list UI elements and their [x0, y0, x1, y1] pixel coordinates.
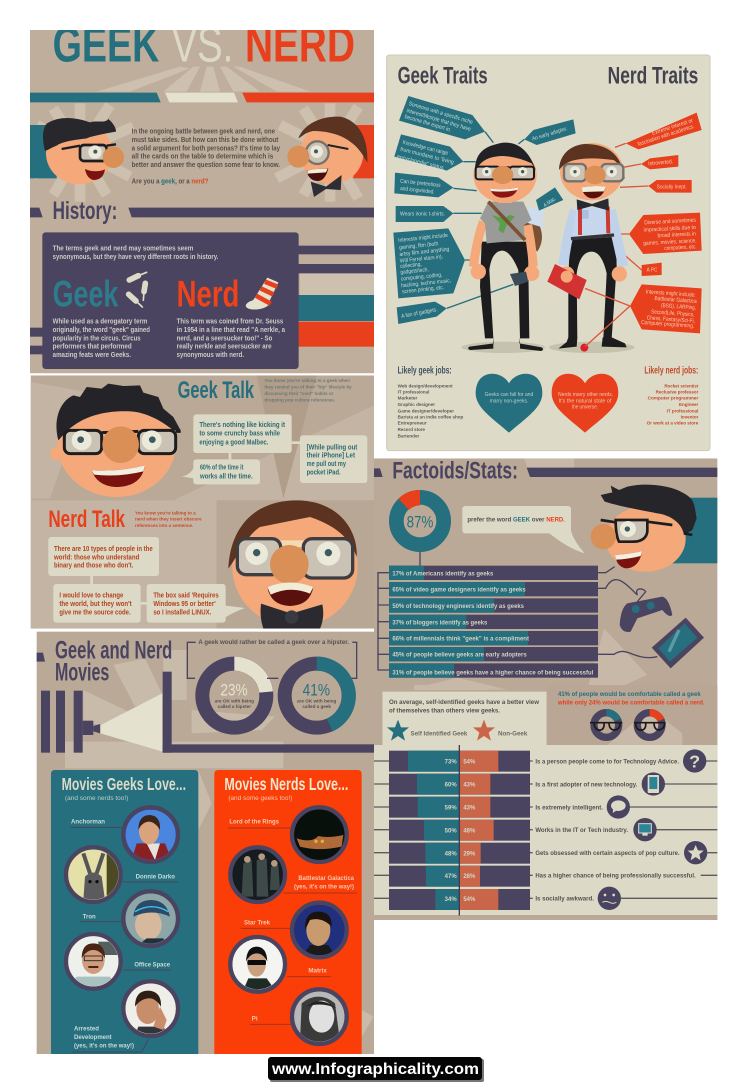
intro text: In the ongoing battle between geek and nerd, one: [132, 127, 275, 136]
panel: movies nerds love: [214, 770, 362, 1054]
comparison row labels: Works in the IT or Tech industry.: [535, 827, 628, 834]
likely geek jobs: Marketer: [398, 396, 417, 402]
nerd talk description: You know you're talking to a: [135, 511, 196, 516]
geeks list heading: Movies Geeks Love...: [62, 774, 186, 794]
speech bubbles: geek: pocket iPad.: [307, 469, 341, 476]
intro text: all the cards on the table to determine which is: [132, 152, 273, 161]
trait labels: nerd: Diverse and sometimes: [644, 218, 696, 226]
likely geek jobs: Record store: [398, 427, 425, 433]
photo: Star Trek: [292, 903, 347, 957]
connector lines: [447, 132, 524, 308]
icon: monitor: [633, 818, 657, 841]
likely geek jobs: Game designer/developer: [398, 408, 454, 414]
trait labels: nerd: games, movies, science,: [643, 238, 697, 247]
icon: film projector: [41, 672, 374, 753]
chart: diverging bars: 60%: [445, 783, 457, 789]
chart: 23% donut: called a hipster: [218, 704, 251, 709]
trait labels: nerd: Battlestar Galactica: [654, 296, 698, 305]
icon: phone: [642, 772, 665, 796]
photo: Tron: [123, 891, 178, 946]
trait labels: geek: interest/lifestyle that they have: [406, 108, 471, 133]
character: nerd: [547, 143, 634, 353]
hipster callout: [187, 639, 357, 678]
nerd history text: in 1954 in a line that read "A nerkle, a: [177, 325, 286, 334]
factoids heading: Factoids/Stats:: [392, 457, 518, 484]
trait labels: nerd: SecondLife, Physics,: [651, 309, 695, 318]
chart: diverging bars: 48%: [463, 828, 476, 834]
comfortable callout text: while only 24% would be comfortable called a nerd.: [557, 699, 705, 706]
speech bubble: 87%: prefer the word GEEK over NERD.: [467, 516, 565, 523]
trait labels: geek: [393, 96, 576, 324]
icon: question mark: [683, 749, 706, 773]
photo: Arrested Development: [123, 981, 178, 1036]
chart: 41% donut: [267, 657, 356, 731]
heart: nerds: Nerds marry other nerds.: [558, 392, 614, 398]
trait labels: nerd: Introverted.: [648, 159, 674, 167]
likely geek jobs: Bartender: [398, 433, 419, 439]
side bars: [30, 246, 374, 354]
chart: percentage bars: 45% of people believe geeks are early adopters: [392, 652, 527, 659]
geek traits heading: Geek Traits: [398, 62, 488, 89]
trait labels: nerd: impractical skills due to: [643, 225, 696, 234]
comparison row labels: [535, 758, 696, 903]
history intro: [52, 245, 218, 260]
trait labels: geek: from mundane to "living: [400, 147, 454, 166]
chart: 41% donut: called a geek: [302, 704, 331, 709]
intro text: must take sides. But how can this be done without: [132, 135, 279, 144]
likely nerd jobs: IT professional: [667, 408, 699, 414]
chart: 41% donut: are OK with being: [297, 698, 336, 703]
chart: 87% donut: [396, 490, 444, 566]
panel: title and history: [30, 17, 374, 373]
title: [54, 30, 354, 62]
trait labels: geek: hacking, techno music,: [401, 278, 452, 289]
trait labels: geek: gadgets/tech,: [400, 267, 429, 276]
trait labels: geek: collecting,: [400, 262, 422, 270]
trait labels: geek: A fan of gadgets.: [401, 307, 438, 320]
comparison row labels: Has a higher chance of being professionally successful.: [535, 873, 696, 880]
nerd talk description: references into a sentence.: [135, 523, 193, 528]
nerd talk heading: Nerd Talk: [48, 506, 125, 533]
trait labels: nerd: [626, 113, 702, 333]
title: GEEK: [53, 17, 159, 73]
movie labels: Development: [74, 1034, 112, 1041]
comparison intro: [389, 699, 539, 715]
movies heading: [37, 636, 172, 687]
trait labels: geek: Wears ironic t-shirts.: [400, 212, 445, 218]
nerds list heading: Movies Nerds Love...: [224, 774, 348, 794]
comfortable callout text: 41% of people would be comfortable called a geek: [558, 691, 701, 698]
chart: percentage bars: 65% of video game designers identify as geeks: [392, 587, 526, 594]
chart: percentage bars: 17% of Americans identify as geeks: [392, 570, 494, 577]
chart: percentage bars: 31% of people believe geeks have a higher chance of being successful: [392, 670, 594, 677]
chart: diverging bars: 48%: [445, 851, 457, 857]
tricolour stripes: [30, 93, 374, 102]
speech bubbles: geek: [182, 414, 367, 484]
speech bubbles: nerd: [48, 537, 245, 623]
history intro: The terms geek and nerd may sometimes seem: [53, 243, 194, 252]
speech bubbles: geek: works all the time.: [199, 473, 253, 480]
panel: factoids and stats: [374, 457, 718, 920]
likely nerd jobs: Reclusive professor: [656, 390, 698, 396]
book and ball connectors: [585, 288, 630, 347]
chart: diverging bars: 43%: [463, 783, 476, 789]
panel: traits: [387, 55, 710, 451]
trait labels: geek: and longwinded.: [400, 186, 435, 196]
chart: percentage bars: 50% of technology engineers identify as geeks: [392, 603, 524, 610]
geek talk description: [264, 378, 352, 403]
geek history text: performers that performed: [53, 342, 132, 351]
panel: self-image comparison: [374, 685, 717, 920]
legend: Non-Geek: [498, 731, 528, 738]
chart: diverging bars: 59%: [445, 806, 457, 812]
speech bubbles: geek: 60% of the time it: [200, 465, 244, 472]
panel: movies: [37, 632, 374, 1054]
icon: awkward face: [598, 887, 621, 910]
nerds list subheading: (and some geeks too!): [228, 795, 292, 802]
movie labels: Lord of the Rings: [229, 819, 279, 826]
photo: Battlestar Galactica: [230, 847, 285, 902]
likely geek jobs: Barista at an indie coffee shop: [398, 414, 463, 420]
likely geek jobs: Likely geek jobs:: [398, 365, 452, 376]
likely nerd jobs: Rocket scientist: [664, 383, 699, 389]
speech bubbles: nerd: world: those who understand: [53, 554, 139, 561]
background shards: [414, 458, 647, 690]
trait labels: geek: artsy film and anything: [399, 247, 450, 258]
trait labels: geek: Interests might include: [398, 233, 448, 244]
movies heading: Geek and Nerd: [55, 636, 172, 664]
geek heading: Geek: [53, 273, 118, 315]
legend: Self Identified Geek: [411, 731, 468, 738]
speech bubbles: geek: me pull out my: [307, 461, 346, 468]
chart: diverging bars: 50%: [445, 828, 457, 834]
chart: diverging bars: 54%: [463, 760, 476, 766]
trait labels: geek: computing, coding,: [401, 272, 443, 283]
nerd history text: nerd, and a seersucker too!" - So: [177, 333, 273, 342]
movie labels: (yes, it's on the way!): [294, 884, 354, 891]
intro text: Are you a geek, or a nerd?: [132, 176, 209, 185]
chart: diverging bars: 54%: [463, 897, 476, 903]
panel: movies geeks love: [51, 770, 198, 1054]
hipster callout: A geek would rather be called a geek over a hipster.: [198, 639, 349, 646]
intro text: a solid argument for both personas? It's time to lay: [132, 143, 281, 152]
trait labels: geek: Someone with a specific niche: [408, 101, 473, 126]
speech bubbles: geek: their iPhone] Let: [307, 453, 356, 460]
trait labels: nerd: Interests might include:: [646, 289, 696, 299]
chart: diverging bars: 29%: [463, 851, 476, 857]
comparison row labels: Is a person people come to for Technology Advice.: [535, 758, 679, 765]
likely geek jobs: Entrepreneur: [398, 421, 427, 427]
likely geek jobs: Graphic designer: [398, 402, 435, 408]
heart: geeks: [476, 374, 542, 433]
trait labels: nerd: A PC: [647, 268, 657, 274]
background shards: [65, 650, 374, 1037]
trait labels: geek: Can be pretentious: [400, 179, 441, 189]
chart: 41% donut: 41%: [303, 681, 330, 700]
icon: geek head: [30, 118, 124, 184]
icon: star: [684, 841, 707, 864]
trait labels: nerd: Extreme interest or: [651, 118, 694, 137]
movie labels: Tron: [83, 913, 96, 920]
speech bubbles: nerd: The box said 'Requires: [153, 593, 219, 600]
likely nerd jobs: Or work at a video store: [647, 421, 699, 427]
trait labels: nerd: fascination with academics.: [637, 124, 696, 148]
panel: talk: [31, 375, 374, 629]
comparison row labels: Is socially awkward.: [535, 896, 594, 903]
chart: diverging bars: 43%: [463, 806, 476, 812]
comparison intro: On average, self-identified geeks have a better view: [389, 699, 539, 706]
speech bubbles: nerd: I would love to change: [59, 593, 123, 600]
comfortable callout text: [557, 691, 705, 706]
comfortable callout background: [547, 685, 717, 745]
chart: percentage bars: 37% of bloggers identify as geeks: [392, 619, 488, 626]
speech bubbles: nerd: the world, but they won't: [59, 601, 132, 608]
icon: juggling clubs: [129, 272, 147, 307]
watermark: [268, 1057, 484, 1082]
character: geek: [462, 143, 545, 353]
icon: large geek head: [50, 384, 181, 497]
geek talk description: You know you're talking to a geek when: [264, 378, 350, 384]
nerd talk description: nerd when they insert obscure: [135, 517, 202, 522]
geeks list subheading: (and some nerds too!): [65, 795, 128, 802]
likely geek jobs: IT professional: [398, 390, 430, 396]
history intro: synonymous, but they have very different roots in history.: [53, 252, 218, 261]
chart: diverging bars: 28%: [463, 874, 476, 880]
nerd heading: Nerd: [177, 273, 239, 315]
trait labels: nerd: Socially Inept.: [657, 184, 687, 190]
photo: Lord of the Rings: [292, 807, 347, 862]
speech bubbles: nerd: Windows 95 or better': [153, 601, 216, 608]
nerd traits heading: Nerd Traits: [608, 62, 698, 89]
speech bubbles: geek: enjoying a good Malbec.: [199, 439, 268, 446]
background rays: [33, 67, 374, 295]
history heading: [30, 201, 374, 224]
movie labels: [229, 819, 354, 1022]
movie labels: Office Space: [134, 962, 170, 969]
trait labels: nerd: Computer programming.: [641, 320, 695, 330]
intro text: better and answer the question some fear to know.: [132, 160, 280, 169]
title: NERD: [245, 17, 355, 73]
trait labels: geek: gaming, film (both: [399, 241, 439, 251]
comparison row labels: Is extremely intelligent.: [535, 804, 603, 811]
movie labels: Anchorman: [71, 819, 105, 826]
movie labels: Star Trek: [244, 919, 270, 926]
photo: Anchorman: [123, 807, 178, 862]
speech bubbles: nerd: binary and those who don't.: [54, 563, 133, 570]
trait labels: nerd: computers, etc.: [664, 244, 697, 252]
icon: glasses donuts: [590, 713, 666, 737]
photo: Office Space: [66, 934, 121, 989]
likely nerd jobs: Engineer: [679, 402, 698, 408]
icon: striped hat: [245, 278, 278, 311]
speech bubbles: geek: [While pulling out: [307, 444, 358, 451]
geek talk heading: Geek Talk: [178, 377, 254, 404]
chart: diverging bars: 73%: [445, 760, 457, 766]
likely geek jobs: Web design/development: [398, 383, 453, 389]
geek talk description: dropping pop culture references.: [264, 397, 336, 403]
comparison row labels: Gets obsessed with certain aspects of pop culture.: [535, 850, 680, 857]
movie labels: Matrix: [308, 968, 327, 975]
chart: 23% donut: are OK with being: [215, 698, 254, 703]
chart: diverging bars: [374, 745, 717, 916]
icon: large nerd head: [228, 500, 358, 629]
panel: history box: [42, 232, 299, 369]
nerd history text: really nerkle and seersucker are: [177, 342, 272, 351]
trait labels: geek: become the expert in.: [404, 114, 452, 134]
heart: nerds: the universe.: [572, 404, 598, 410]
movie labels: Battlestar Galactica: [298, 875, 354, 882]
chart: 87% donut: 87%: [407, 512, 433, 531]
icon: question mark: ?: [689, 752, 700, 772]
geek talk description: they remind you of their "hip" lifestyle by: [264, 385, 352, 391]
trait labels: geek: Will Ferrel stars in),: [400, 254, 444, 265]
chart: diverging bars: 34%: [445, 897, 457, 903]
chart: 23% donut: 23%: [220, 681, 248, 700]
trait labels: nerd: (BSG), LARPing,: [661, 303, 697, 311]
heart: geeks: Geeks can fall for and: [485, 392, 533, 398]
comparison intro: of themselves than others view geeks.: [389, 708, 500, 715]
icon: stats geek head: [591, 485, 718, 572]
trait labels: nerd: broad interests in: [657, 231, 696, 239]
movie labels: [71, 819, 175, 1049]
heart: nerds: [552, 374, 618, 433]
history heading: History:: [53, 198, 117, 225]
chart: percentage bars: 66% of millennials think "geek" is a compliment: [392, 636, 530, 643]
geek history text: While used as a derogatory term: [53, 317, 148, 326]
factoids heading: [374, 461, 718, 479]
bracket connectors: [378, 567, 657, 670]
nerd history text: This term was coined from Dr. Seuss: [177, 317, 283, 326]
likely nerd jobs: Inventor: [681, 414, 698, 420]
heart: nerds: It's the natural state of: [559, 398, 612, 404]
icon: speech bubble: [607, 795, 630, 819]
speech bubbles: nerd: There are 10 types of people in the: [54, 546, 153, 553]
heart: geeks: marry non-geeks.: [490, 398, 529, 404]
icon: game controller: [620, 597, 672, 632]
speech bubbles: nerd: give me the source code.: [59, 609, 131, 616]
speech bubble: 87%: [462, 506, 585, 553]
title: VS.: [172, 17, 233, 73]
icon: nerd head: [287, 117, 374, 197]
nerd history text: [177, 317, 286, 359]
speech bubbles: nerd: so I installed LINUX.: [153, 609, 211, 616]
trait labels: geek: An early adopter.: [531, 126, 569, 143]
likely nerd jobs: Computer programmer: [648, 396, 698, 402]
legend: [387, 720, 528, 741]
geek history text: amazing feats were Geeks.: [53, 350, 131, 359]
movies heading: Movies: [55, 659, 109, 687]
intro text: [132, 127, 281, 185]
likely nerd jobs: [644, 365, 699, 427]
top connector: [414, 685, 491, 690]
movie labels: (yes, it's on the way!): [74, 1042, 134, 1049]
likely geek jobs: [398, 365, 463, 439]
background shards: [31, 382, 374, 629]
trait labels: geek: screen printing, etc.: [402, 285, 445, 295]
movie labels: Pi: [252, 1015, 258, 1022]
geek history text: originally, the word "geek" gained: [53, 325, 150, 334]
comparison row labels: Is a first adopter of new technology.: [535, 781, 637, 788]
trait labels: geek: encyclopedia" status.: [396, 154, 446, 172]
movie labels: Arrested: [74, 1025, 99, 1032]
trait labels: geek: Knowledge can range: [402, 140, 449, 157]
chart: percentage bars: [389, 566, 598, 678]
chart: diverging bars: 47%: [445, 874, 457, 880]
trait labels: nerd: Chess, Fantasy/Sci-Fi,: [647, 315, 696, 325]
chart: 23% donut: [202, 657, 273, 728]
speech bubbles: geek: There's nothing like kicking it: [199, 422, 286, 429]
watermark: www.Infographicality.com: [271, 1061, 479, 1078]
trait labels: geek: A Mac.: [543, 196, 558, 209]
likely nerd jobs: Likely nerd jobs:: [644, 365, 698, 376]
geek history text: [53, 317, 150, 359]
geek history text: popularity in the circus. Circus: [53, 333, 141, 342]
photo: Matrix: [230, 937, 285, 992]
photo: Donnie Darko: [66, 847, 121, 902]
nerd talk description: [135, 511, 202, 528]
icon: tablet: [652, 618, 704, 668]
nerd history text: synonymous with nerd.: [177, 350, 244, 359]
movie labels: Donnie Darko: [136, 874, 175, 881]
geek talk description: discussing their "cool" habits or: [264, 391, 333, 397]
speech bubbles: geek: to some crunchy bass while: [199, 431, 280, 438]
photo: Pi: [292, 989, 347, 1044]
